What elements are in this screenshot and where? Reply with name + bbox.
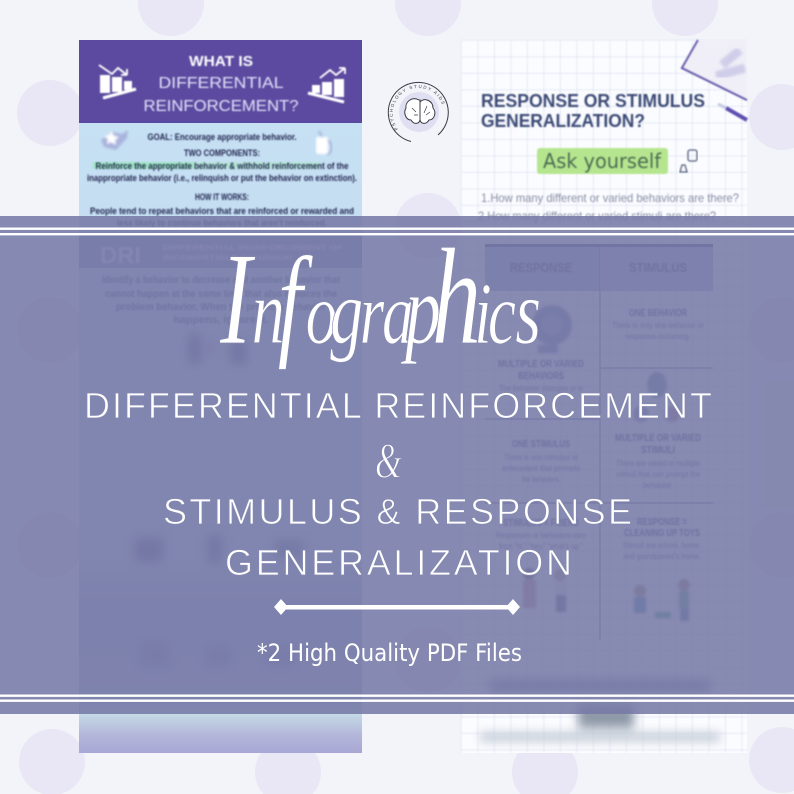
text: goal and components: less likely to continue behaviors that aren't reinforced. — [117, 218, 327, 229]
subtitle: stimulus and response: STIMULUS & RESPONSE — [163, 491, 632, 532]
table: response vs stimulus: RESPONSE = — [637, 516, 687, 528]
table: response vs stimulus: and grandparent's home. — [623, 551, 701, 561]
panel: differential reinforcement infographic preview — [79, 40, 362, 753]
table: response vs stimulus: RESPONSE — [510, 260, 572, 275]
subtitle: differential reinforcement: DIFFERENTIAL REINFORCEMENT — [84, 385, 712, 426]
icon: gear heads — [532, 305, 572, 353]
illustration: children greeting — [523, 568, 566, 612]
title: Infographics: f — [278, 232, 313, 371]
table: response vs stimulus: MULTIPLE OR VARIED — [615, 432, 701, 444]
title: Infographics: a — [382, 265, 414, 363]
table: response vs stimulus: There is only one behavior or — [612, 320, 704, 330]
logo: psychology study aids — [388, 82, 449, 142]
section: DRI header — [79, 235, 362, 268]
text: questions: 2.How many different or varied stimuli are there? — [478, 209, 716, 223]
icon: bottle — [316, 131, 332, 155]
title: Infographics: g — [330, 263, 363, 364]
text: goal and components: TWO COMPONENTS: — [184, 148, 260, 159]
heading: response or stimulus generalization: RESPONSE OR STIMULUS — [481, 90, 705, 111]
table: response vs stimulus: MULTIPLE OR VARIED — [498, 358, 584, 370]
text: DRI definition: cannot happen at the same time that also replaces the — [105, 289, 337, 300]
illustration: children cleaning up toys — [634, 579, 690, 621]
text: goal and components: GOAL: Encourage appropriate behavior. — [148, 132, 296, 143]
text: goal and components — [87, 132, 357, 229]
title: Infographics: r — [360, 265, 385, 363]
header: what is differential reinforcement: REINFORCEMENT? — [144, 98, 299, 115]
text: DRI definition: happens, ignore it. — [174, 315, 269, 326]
title: Infographics: o — [306, 265, 337, 363]
title: Infographics: c — [488, 265, 516, 363]
title: Infographics: p — [400, 253, 441, 365]
divider with diamonds — [274, 599, 520, 615]
text: DRI definition: problem behavior. When the problem behavior — [116, 302, 326, 313]
text: logo ring: PSYCHOLOGY STUDY AIDS — [390, 84, 445, 130]
table: response vs stimulus: STIMULUS = FRIEND — [503, 517, 579, 529]
table: response vs stimulus: antecedent that prompts — [502, 463, 580, 473]
header: what is differential reinforcement: DIFFERENTIAL — [158, 75, 284, 92]
icon: clipboard and pen — [682, 40, 747, 120]
heading: response or stimulus generalization — [481, 90, 705, 131]
table: response vs stimulus: ONE BEHAVIOR — [629, 307, 687, 319]
table: response vs stimulus: STIMULUS — [629, 260, 687, 275]
illustration: blurred people — [189, 335, 246, 364]
table: response vs stimulus: Responses or behaviors vary — [496, 530, 587, 540]
table: response vs stimulus: There is one stimulus or — [504, 452, 578, 462]
title: Infographics: s — [515, 263, 541, 364]
icon: rising bar chart — [308, 68, 345, 102]
icon: stars — [101, 130, 128, 150]
subtitle: generalization: GENERALIZATION — [225, 542, 572, 583]
table: response vs stimulus: from "hi," "hey," "what's up." — [499, 541, 583, 551]
table: response vs stimulus: behavior. — [643, 480, 673, 490]
table: response vs stimulus: ONE STIMULUS — [512, 438, 570, 450]
section: DRI header: INCOMPATIBLE BEHAVIOR — [163, 253, 294, 262]
text: goal and components: People tend to repeat behaviors that are reinforced or rewarded and — [90, 206, 354, 217]
text: questions — [478, 191, 739, 223]
ampersand: & — [375, 432, 402, 488]
icon: multiple stimuli — [633, 372, 680, 422]
highlight: green marker — [93, 162, 321, 169]
heading: response or stimulus generalization: GENERALIZATION? — [481, 110, 645, 131]
illustration: blurred lower row — [135, 535, 303, 668]
table: response vs stimulus: CLEANING UP TOYS — [624, 527, 700, 539]
table: response vs stimulus: STIMULI — [641, 444, 675, 456]
text: DRI definition: Identify a behavior to decrease and another behavior that — [102, 275, 341, 286]
text: goal and components: HOW IT WORKS: — [195, 192, 249, 203]
title: Infographics: h — [432, 221, 481, 374]
section: DRI header: DIFFERENTIAL REINFORCEMENT OF — [163, 243, 344, 252]
table: response vs stimulus: There are varied or multiple — [616, 458, 700, 468]
table: response vs stimulus: response occurring. — [626, 331, 690, 341]
header: what is differential reinforcement: WHAT IS — [189, 53, 253, 70]
icon: brain — [405, 99, 435, 123]
text: questions: 1.How many different or varied behaviors are there? — [481, 191, 739, 205]
table: response vs stimulus — [485, 244, 713, 640]
table: response vs stimulus: BEHAVIORS — [518, 370, 564, 382]
table: response vs stimulus: the behaviors. — [522, 474, 560, 484]
panel: response or stimulus generalization preview — [461, 40, 747, 753]
note: pdf files: *2 High Quality PDF Files — [257, 639, 522, 667]
header: what is differential reinforcement — [79, 40, 362, 123]
text: goal and components: Reinforce the appropriate behavior & withhold reinforcement of the — [96, 161, 348, 172]
text: DRI definition — [102, 275, 341, 326]
title: Infographics: n — [252, 263, 285, 364]
icon: person with question bubble — [680, 150, 697, 172]
banner: translucent overlay — [0, 216, 794, 714]
table: response vs stimulus: Stimuli are school, home, — [623, 540, 701, 550]
title: Infographics: I — [219, 226, 256, 372]
footer: blurred strip — [480, 680, 720, 742]
section: DRI header: DRI — [100, 242, 141, 268]
icon: falling bar chart — [99, 65, 136, 98]
callout: ask yourself: Ask yourself — [543, 149, 662, 173]
text: goal and components: inappropriate behavior (i.e., relinquish or put the behavior on extinction). — [87, 173, 357, 184]
table: response vs stimulus: stimuli that can prompt the — [616, 469, 700, 479]
title: Infographics: i — [474, 265, 492, 363]
table: response vs stimulus: The behavior changes or is — [499, 383, 583, 393]
